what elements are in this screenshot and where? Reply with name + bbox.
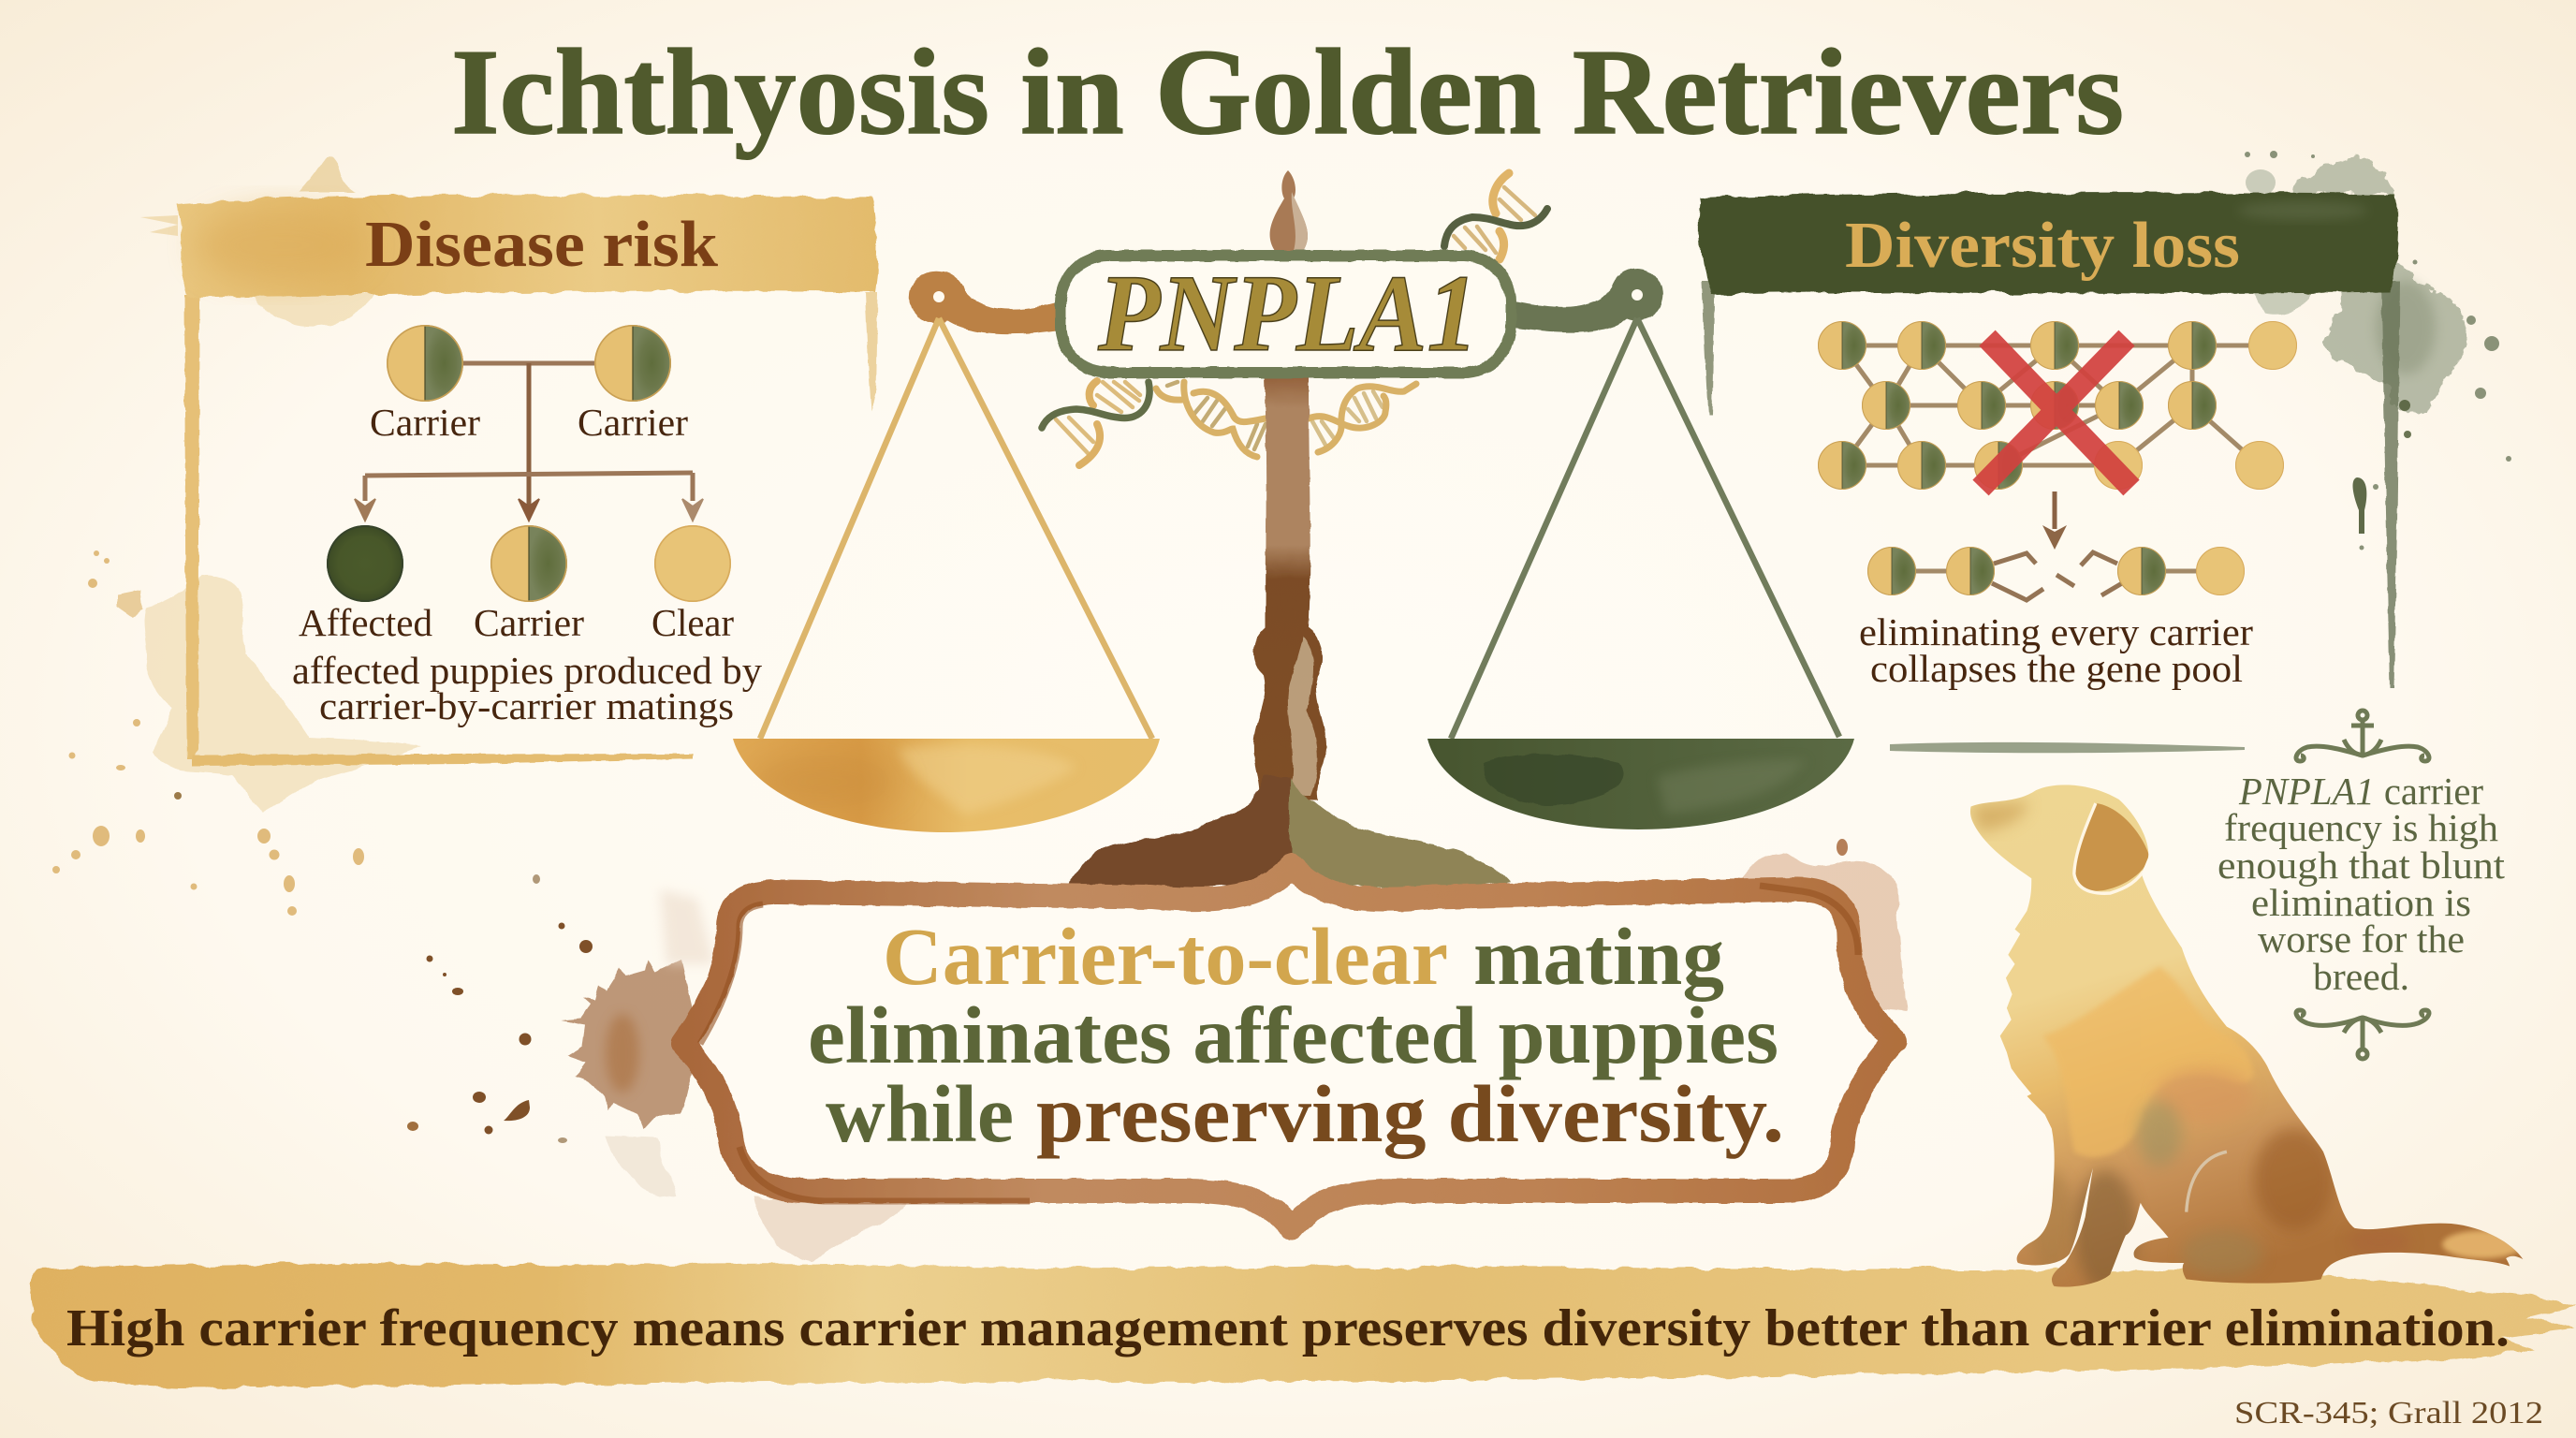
node: carrier pup [490, 525, 567, 602]
watercolor frame and stains [117, 156, 878, 813]
panel: disease risk [117, 156, 878, 813]
caption: diversity loss: collapses the gene pool [1870, 647, 2243, 690]
left pan [733, 735, 1160, 838]
source citation: SCR-345; Grall 2012 [2234, 1396, 2543, 1431]
balance scale [733, 170, 1854, 891]
caption: disease risk [292, 649, 763, 727]
side note: enough that blunt [2217, 844, 2506, 887]
bottom banner [30, 1264, 2576, 1387]
arrow down [2042, 492, 2067, 550]
side note: breed. [2313, 955, 2409, 998]
side note: worse for the [2258, 917, 2465, 961]
side note: elimination is [2251, 881, 2471, 924]
side note: frequency is high [2224, 806, 2498, 849]
base right [1290, 777, 1509, 889]
red cross [1981, 338, 2131, 488]
dna left [1042, 381, 1149, 465]
central post [1253, 374, 1326, 800]
label: affected: Affected [299, 601, 432, 644]
callout text: preserving diversity. [1036, 1068, 1784, 1159]
callout text: mating [1473, 911, 1724, 1002]
green stains and drips [1700, 157, 2467, 688]
node: affected [327, 525, 403, 602]
dog illustration [1962, 776, 2537, 1296]
callout: carrier-to-clear mating [683, 866, 1895, 1228]
post highlight [1288, 637, 1318, 796]
bottom takeaway: High carrier frequency means carrier management preserves diversity better than carrier elimination. [66, 1299, 2510, 1357]
base left [1069, 777, 1290, 891]
heading: diversity loss: Diversity loss [1845, 210, 2240, 282]
gene plaque [1061, 256, 1511, 373]
ornament: top anchor [2296, 711, 2429, 761]
divider stroke [1890, 742, 2245, 753]
node: carrier parent [387, 325, 463, 402]
callout text: while [826, 1068, 1014, 1159]
side note [2217, 770, 2506, 998]
node: clear [654, 525, 731, 602]
broken network [1867, 547, 2245, 600]
gene name: PNPLA1 [1097, 252, 1478, 374]
frame shading [700, 886, 1858, 1201]
label: carrier: Carrier [578, 401, 688, 444]
network diagram [1818, 321, 2297, 490]
pivot holes [933, 289, 1643, 302]
dna right [1309, 384, 1416, 452]
label: carrier: Carrier [370, 401, 480, 444]
callout text: Carrier-to-clear [883, 911, 1448, 1002]
panel: diversity loss [1700, 157, 2467, 690]
node: carrier parent [594, 325, 671, 402]
network edges [1842, 345, 2273, 465]
caption: disease risk: affected puppies produced by [292, 649, 763, 692]
connector lines and arrows [355, 363, 703, 521]
dna helix decorations [1042, 173, 1547, 465]
right beam arm [1515, 269, 1662, 332]
right strings [1451, 318, 1839, 739]
network nodes [1818, 321, 2297, 490]
left strings [760, 318, 1152, 739]
caption: diversity loss: eliminating every carrier [1859, 610, 2253, 653]
ornate frame [683, 866, 1895, 1228]
caption: diversity loss [1859, 610, 2253, 690]
finial [1270, 170, 1308, 251]
side note: PNPLA1 carrier [2238, 770, 2483, 813]
label: clear: Clear [651, 601, 734, 644]
heading: disease risk: Disease risk [365, 209, 718, 281]
brown splatter and stains [407, 839, 1905, 1261]
right pan [1427, 735, 1854, 833]
label: carrier: Carrier [474, 601, 584, 644]
title: Ichthyosis in Golden Retrievers [451, 24, 2124, 160]
left beam arm [910, 271, 1062, 334]
caption: disease risk: carrier-by-carrier matings [319, 684, 734, 727]
callout text [808, 911, 1784, 1159]
dna center [1156, 382, 1266, 457]
dna top right [1444, 173, 1547, 259]
pedigree chart [299, 325, 734, 644]
green spatter [2245, 151, 2511, 550]
ornament: bottom anchor [2296, 1010, 2429, 1059]
gold spatter [52, 550, 364, 916]
callout text: eliminates affected puppies [808, 990, 1778, 1080]
